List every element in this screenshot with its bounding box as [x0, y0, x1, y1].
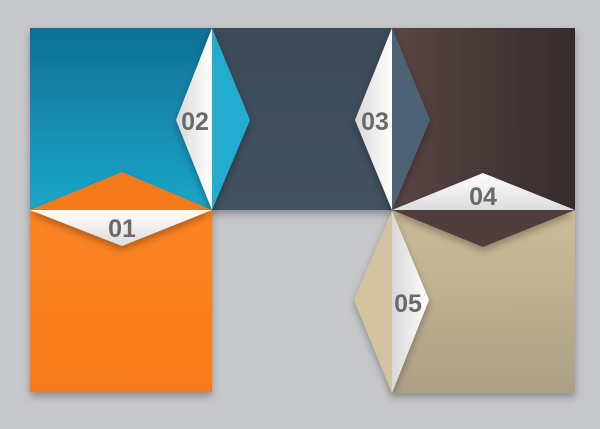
panel: tan square [392, 211, 575, 393]
label 05: 05 [394, 290, 422, 318]
panel: orange square [30, 210, 212, 392]
fold 04 [392, 173, 575, 247]
label 02: 02 [181, 108, 209, 136]
label 03: 03 [361, 108, 389, 136]
panel: blue square [30, 28, 212, 210]
panel: slate square [212, 28, 392, 210]
label 01: 01 [108, 215, 136, 243]
fold 03 [355, 28, 430, 210]
fold 02 [176, 28, 250, 210]
fold 01 [30, 172, 212, 246]
label 04: 04 [469, 183, 497, 211]
fold 05 [354, 211, 429, 393]
panel: brown square [392, 28, 575, 210]
